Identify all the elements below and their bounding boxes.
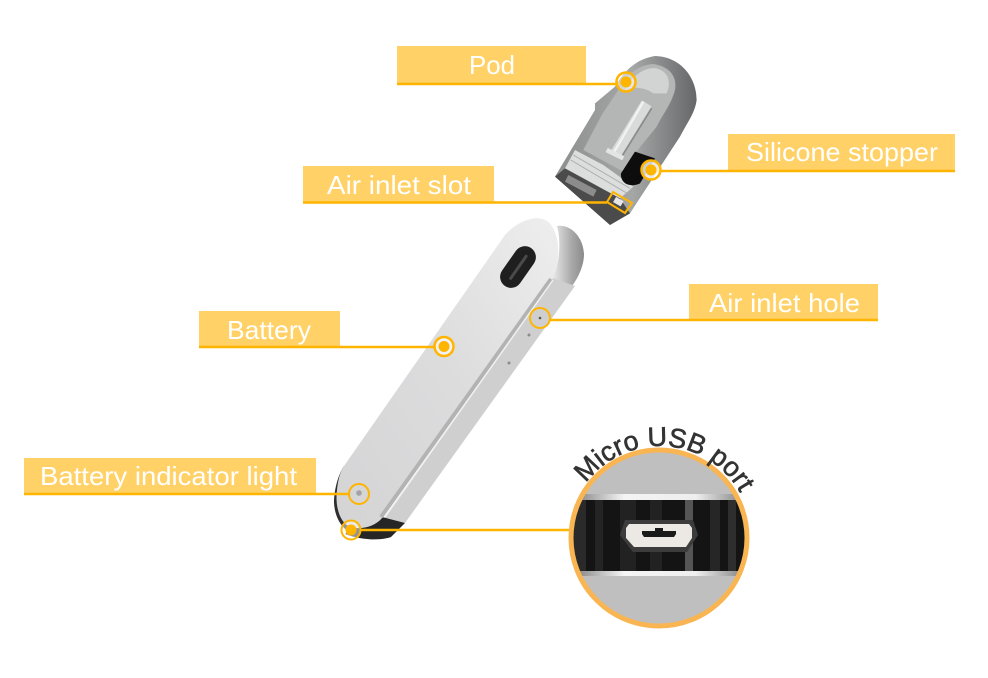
indicator light dot — [356, 490, 362, 496]
label: Silicone stopper: Silicone stopper — [746, 137, 938, 167]
battery side pin holes — [508, 317, 541, 364]
callout: Micro USB port magnified view — [570, 450, 750, 626]
label: Battery indicator light — [24, 458, 369, 504]
callout: Micro USB port leader — [342, 520, 572, 540]
silicone stopper — [621, 152, 655, 185]
battery side face — [383, 278, 575, 523]
pod dark bottom band — [555, 168, 630, 225]
label: Air inlet slot: Air inlet slot — [327, 170, 472, 200]
heading: Micro USB port curved text: Micro USB port — [573, 426, 754, 494]
pod lower translucent base — [565, 150, 633, 198]
label: Pod: Pod — [469, 50, 515, 80]
battery top end cap — [553, 226, 584, 286]
battery left dark rim — [334, 466, 358, 534]
battery bottom black end — [345, 517, 405, 539]
pod inner window — [583, 64, 675, 172]
label: Air inlet hole — [530, 284, 878, 328]
label: Battery indicator light: Battery indicator light — [40, 461, 298, 491]
battery front face — [337, 218, 558, 528]
label: Air inlet hole: Air inlet hole — [709, 288, 860, 318]
label: Air inlet slot — [303, 166, 632, 213]
pod shell — [555, 56, 697, 225]
label: Battery — [199, 311, 454, 356]
illustration: pod — [555, 56, 697, 225]
illustration: battery body — [334, 218, 584, 539]
icon: micro USB socket — [620, 520, 698, 552]
label: Pod — [397, 46, 636, 92]
pod top light dome — [625, 68, 669, 93]
battery edge highlight — [381, 279, 551, 517]
pod inner tube — [615, 103, 647, 155]
air inlet opening — [613, 197, 624, 206]
label: Battery: Battery — [227, 315, 311, 345]
label: Silicone stopper — [642, 134, 955, 180]
battery oval slot — [496, 242, 540, 292]
